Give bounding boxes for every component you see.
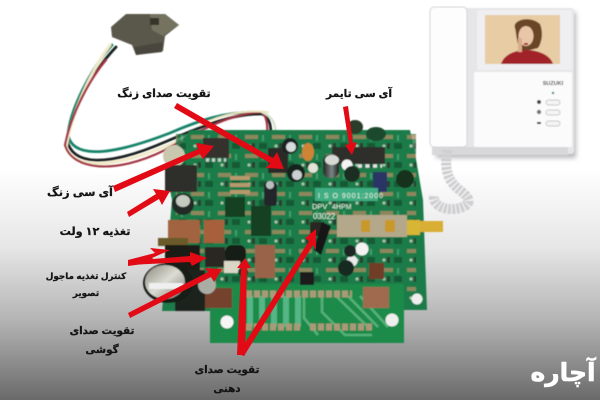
arrow: timer IC — [343, 106, 357, 155]
label: ring IC: آی سی زنگ — [47, 185, 114, 199]
arrow: earpiece amplifier — [128, 268, 222, 318]
label: microphone amplifier: تقویت صدای — [195, 365, 260, 376]
label: ring amplifier: تقویت صدای زنگ — [117, 86, 211, 100]
big capacitor — [143, 238, 205, 311]
label: microphone amplifier, line 2: دهنی — [213, 384, 241, 395]
orange connectors — [168, 220, 389, 308]
handset — [430, 7, 467, 147]
label: video module power control: کنترل تغذیه ماجول — [46, 271, 127, 282]
video intercom — [430, 7, 576, 209]
buttons — [537, 92, 560, 126]
arrows: video module power — [128, 248, 207, 266]
label: video module power control, line 2: تصویر — [72, 288, 99, 299]
coiled cord — [434, 150, 469, 209]
ring amplifier parts — [225, 138, 305, 236]
label: earpiece amplifier: تقویت صدای — [70, 326, 135, 337]
microphone amplifier parts — [300, 222, 384, 285]
label: 12V supply: تغذیه ۱۲ ولت — [60, 226, 130, 238]
board: terminal strip — [210, 284, 422, 343]
board markings: 4HPM — [332, 204, 352, 211]
photo screen — [485, 15, 560, 64]
screen bezel — [477, 10, 572, 70]
circuit board — [143, 120, 443, 343]
label: timer IC: آی سی تایمر — [325, 86, 392, 100]
arrow: ring amplifier — [174, 103, 284, 169]
label: earpiece amplifier, line 2: گوشی — [85, 343, 120, 356]
board markings: DPV — [312, 202, 327, 211]
slide switch — [337, 215, 407, 237]
board markings — [312, 202, 352, 221]
yellow jack — [407, 220, 443, 235]
connector plug — [111, 14, 179, 55]
logo: آچاره — [530, 357, 597, 387]
pad and regulator — [163, 145, 197, 215]
capacitors and parts near the timer — [302, 120, 414, 192]
intercom shadow — [436, 12, 576, 158]
certification strip: I S O 9001:2000 — [318, 193, 384, 200]
ring IC — [203, 138, 229, 160]
arrow: 12V supply — [127, 189, 170, 217]
timer IC — [332, 147, 385, 166]
ribbon wires — [65, 45, 276, 166]
board markings: 03022 — [313, 212, 336, 221]
arrows: microphone amplifier — [237, 229, 316, 356]
brand: SUZUKI — [543, 81, 564, 87]
arrow: ring IC — [113, 143, 214, 192]
base panel — [474, 72, 572, 147]
amplifier components — [198, 245, 248, 294]
certification strip — [315, 188, 384, 201]
board: upper PCB — [162, 130, 427, 343]
